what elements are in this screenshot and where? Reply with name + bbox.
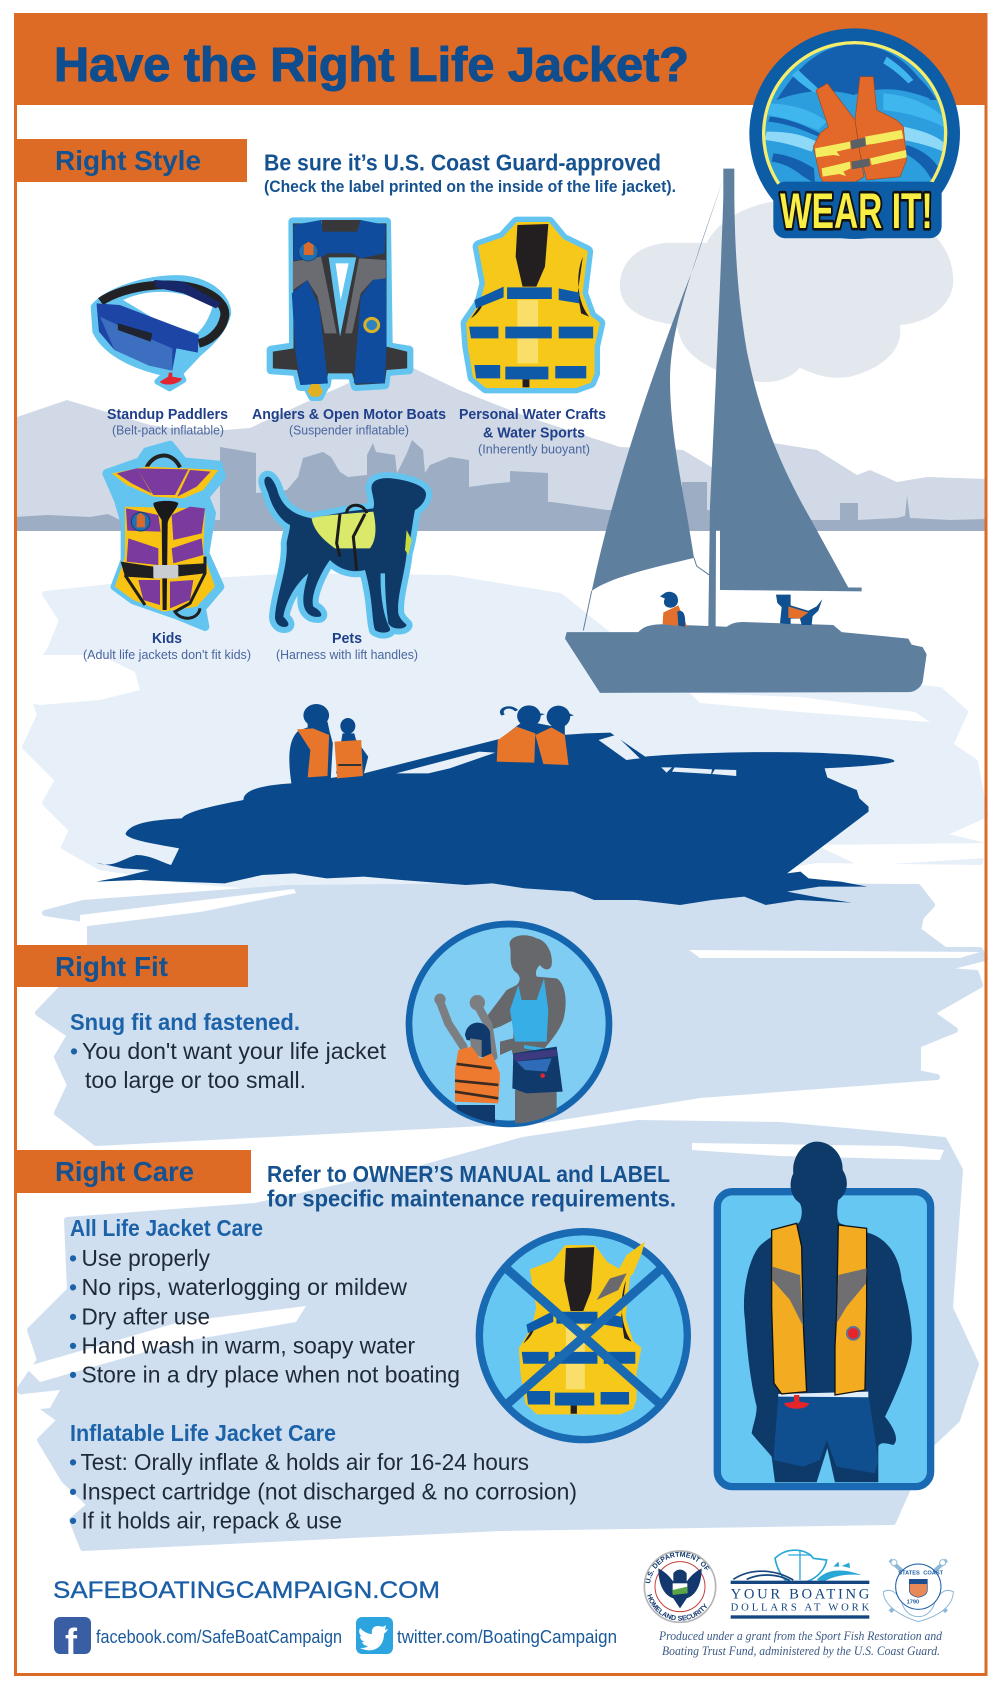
sailboat dog xyxy=(776,595,822,625)
all life jacket care list: Store in a dry place when not boating xyxy=(82,1362,460,1388)
all life jacket care list: No rips, waterlogging or mildew xyxy=(82,1274,407,1300)
twitter address: twitter.com/BoatingCampaign xyxy=(397,1626,617,1647)
jacket labels: (Inherently buoyant) xyxy=(478,442,590,456)
inflatable life jacket care list: Inflatable Life Jacket Care xyxy=(70,1420,336,1446)
background: lower water brush xyxy=(19,1123,976,1548)
passengers left xyxy=(289,704,368,785)
jacket labels: Anglers & Open Motor Boats xyxy=(252,407,446,423)
jacket: pet dog vest xyxy=(264,477,426,633)
funding credit: Boating Trust Fund, administered by the U.S. Coast Guard. xyxy=(662,1643,940,1658)
pet and kid labels xyxy=(83,631,418,662)
child figure xyxy=(434,994,500,1123)
pet and kid labels: Kids xyxy=(152,631,182,647)
inflatable life jacket care list: Inspect cartridge (not discharged & no corrosion) xyxy=(82,1478,577,1504)
badge vest xyxy=(813,77,907,188)
icon: facebook: f xyxy=(65,1621,78,1662)
right fit text xyxy=(70,1009,387,1093)
logo: homeland security seal: HOMELAND SECURITY xyxy=(647,1594,707,1621)
section band: Right Care xyxy=(14,1150,251,1193)
right fit text: too large or too small. xyxy=(85,1067,306,1093)
pet and kid labels: Pets xyxy=(332,631,362,647)
sailor xyxy=(660,592,687,627)
icon: facebook xyxy=(54,1617,91,1662)
jacket labels: Standup Paddlers xyxy=(107,407,228,423)
inflatable life jacket care list: Test: Orally inflate & holds air for 16-24 hours xyxy=(80,1449,529,1475)
section band: Right Style xyxy=(14,139,247,182)
logo: your boating dollars at work: YOUR BOATING xyxy=(731,1587,870,1603)
all life jacket care list: • xyxy=(69,1362,77,1388)
sailboat xyxy=(565,169,927,693)
coast guard approval note: Be sure it’s U.S. Coast Guard-approved xyxy=(264,150,661,176)
inflatable life jacket care list: • xyxy=(69,1478,77,1504)
logo: homeland security seal: U.S. DEPARTMENT OF xyxy=(645,1552,710,1584)
all life jacket care list: • xyxy=(69,1304,77,1330)
jacket: anglers suspender inflatable xyxy=(271,220,409,397)
panel: adult wearing inflatable vest xyxy=(717,1142,931,1487)
owner's manual note xyxy=(267,1161,676,1212)
facebook address: facebook.com/SafeBoatCampaign xyxy=(96,1626,342,1647)
all life jacket care list: All Life Jacket Care xyxy=(70,1215,263,1241)
title: Have the Right Life Jacket? xyxy=(54,39,689,92)
jacket labels: Personal Water Crafts xyxy=(459,407,606,423)
background: mountains xyxy=(14,367,987,531)
all life jacket care list: • xyxy=(69,1245,77,1271)
section band: Right Fit xyxy=(14,945,248,987)
all life jacket care list: Hand wash in warm, soapy water xyxy=(82,1332,415,1358)
pet and kid labels: (Adult life jackets don't fit kids) xyxy=(83,647,251,662)
funding credit xyxy=(658,1628,942,1658)
logo: homeland security seal xyxy=(644,1550,716,1624)
logo: coast guard emblem: COAST xyxy=(923,1570,944,1576)
header banner xyxy=(14,14,987,105)
jacket labels: (Suspender inflatable) xyxy=(289,422,409,438)
background: white brush streaks xyxy=(14,655,985,1412)
jacket labels: & Water Sports xyxy=(483,426,585,442)
prohibition circle over ripped life jacket xyxy=(479,1232,687,1440)
coast guard approval note: (Check the label printed on the inside of the life jacket). xyxy=(264,178,676,196)
funding credit: Produced under a grant from the Sport Fish Restoration and xyxy=(658,1628,942,1643)
logo: your boating dollars at work xyxy=(731,1550,870,1619)
jacket: kids vest xyxy=(107,445,222,627)
motor boat with passengers xyxy=(96,704,894,905)
background: upper water brush xyxy=(25,576,985,890)
background: city skyline xyxy=(14,440,987,531)
section band: Right Care: Right Care xyxy=(55,1156,194,1187)
inflatable life jacket care list xyxy=(69,1420,577,1534)
all life jacket care list: • xyxy=(69,1274,77,1300)
jacket labels: (Belt-pack inflatable) xyxy=(112,422,224,438)
jacket: personal water craft vest xyxy=(467,223,598,387)
circle: adult fitting child life jacket xyxy=(409,924,609,1124)
website url: SAFEBOATINGCAMPAIGN.COM xyxy=(53,1577,440,1604)
passengers right xyxy=(497,705,574,765)
adult figure xyxy=(487,935,566,1123)
badge: wear it xyxy=(749,28,960,239)
all life jacket care list: Dry after use xyxy=(82,1304,210,1330)
right fit text: You don't want your life jacket xyxy=(82,1038,387,1064)
inflatable life jacket care list: • xyxy=(69,1508,77,1534)
jacket: standup paddlers belt pack xyxy=(94,278,228,388)
owner's manual note: for specific maintenance requirements. xyxy=(267,1186,676,1212)
all life jacket care list: Use properly xyxy=(82,1245,210,1271)
inflatable life jacket care list: If it holds air, repack & use xyxy=(82,1508,342,1534)
section band: Right Style: Right Style xyxy=(55,145,201,176)
background: middle water brush xyxy=(38,885,985,1143)
pet and kid labels: (Harness with lift handles) xyxy=(276,647,418,662)
jacket labels xyxy=(107,407,606,456)
all life jacket care list: • xyxy=(69,1332,77,1358)
section band: Right Fit: Right Fit xyxy=(55,951,168,982)
all life jacket care list xyxy=(69,1215,460,1388)
logo: coast guard emblem: 1790 xyxy=(907,1599,919,1605)
right fit text: • xyxy=(70,1038,78,1064)
right fit text: Snug fit and fastened. xyxy=(70,1009,300,1035)
logo: your boating dollars at work: DOLLARS AT WORK xyxy=(731,1603,870,1614)
logo: coast guard emblem xyxy=(883,1560,953,1622)
owner's manual note: Refer to OWNER’S MANUAL and LABEL xyxy=(267,1161,670,1187)
coast guard approval note xyxy=(264,150,676,196)
background: cloud xyxy=(620,200,953,382)
logo: coast guard emblem: STATES xyxy=(898,1570,920,1576)
inflatable life jacket care list: • xyxy=(69,1449,77,1475)
icon: twitter xyxy=(356,1617,393,1654)
